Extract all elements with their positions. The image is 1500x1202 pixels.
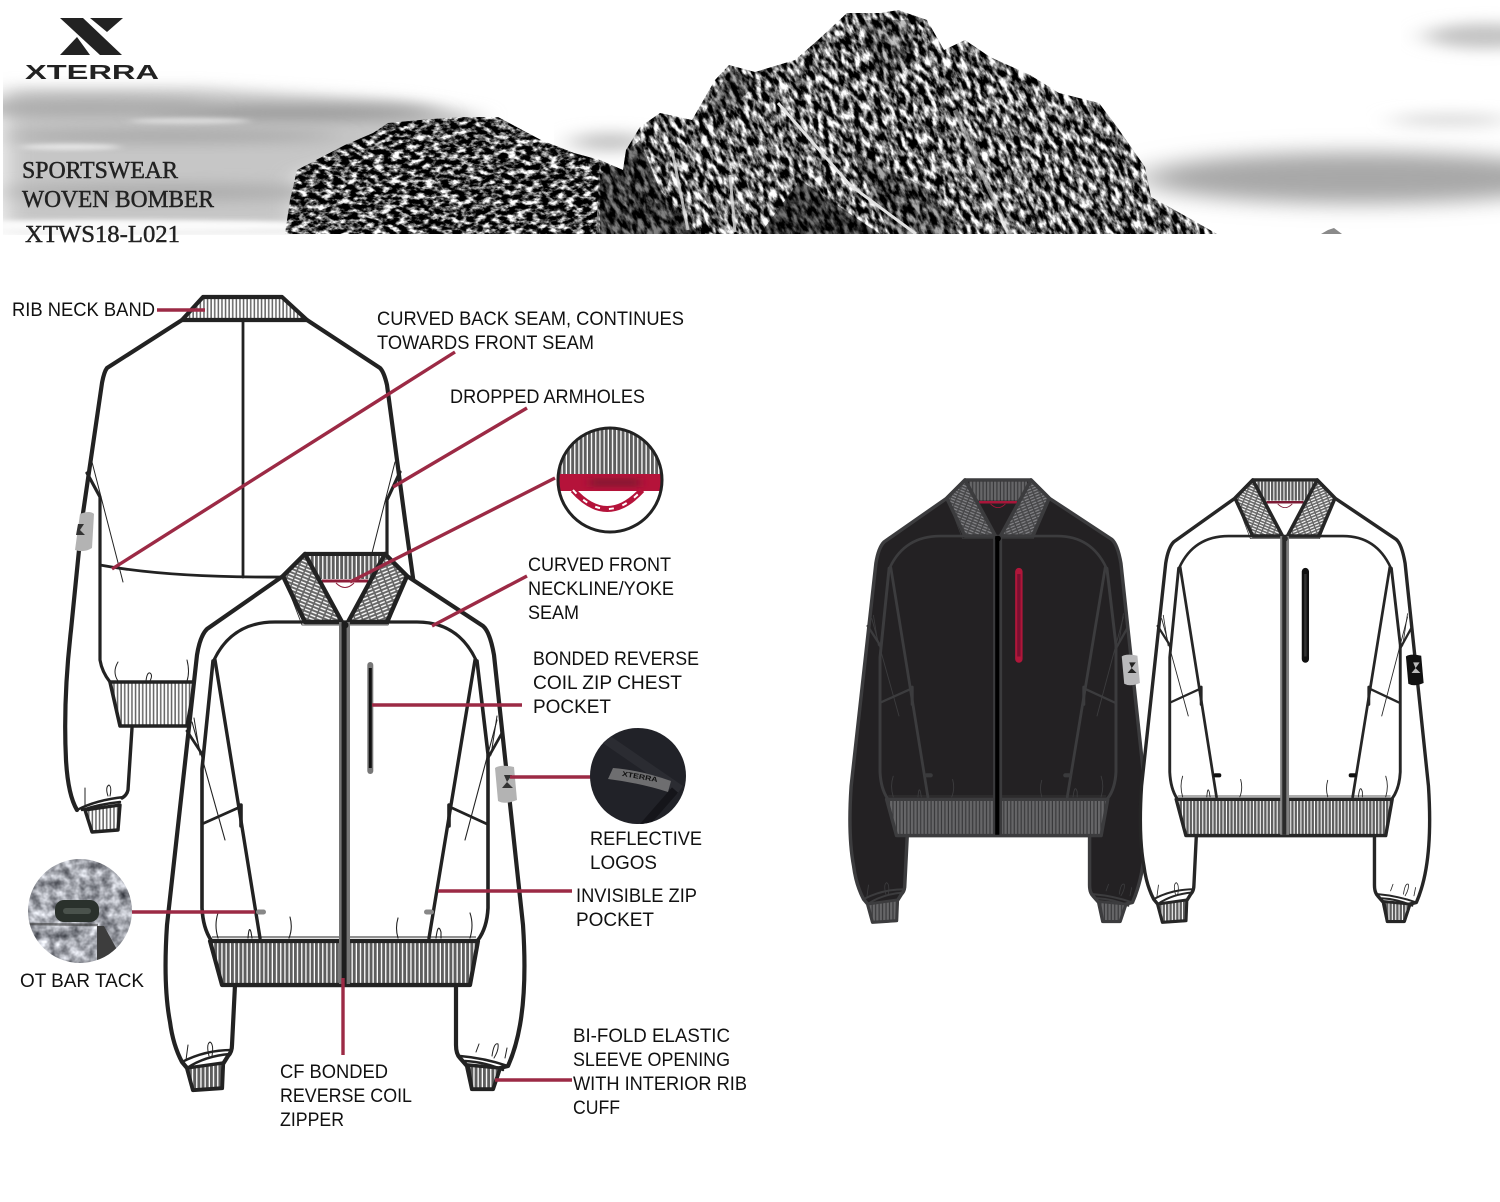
mountain left peak: [285, 117, 602, 234]
label: dropped armholes: DROPPED ARMHOLES: [450, 386, 645, 408]
label: reflective logos: [590, 828, 702, 874]
label: CF bonded zipper: CF BONDED: [280, 1061, 388, 1083]
coloured flat: black jacket: [850, 480, 1146, 922]
label: CF bonded zipper: ZIPPER: [280, 1109, 344, 1131]
label: curved front neckline: [528, 554, 674, 624]
style number: XTWS18-L021: [25, 222, 180, 248]
icon: Xterra logo mark: [60, 18, 123, 55]
small distant peak: [1321, 228, 1342, 234]
label: invisible zip pocket: POCKET: [576, 909, 654, 931]
label: chest pocket: POCKET: [533, 696, 611, 718]
title: sportswear: SPORTSWEAR: [22, 158, 178, 184]
label: curved back seam: TOWARDS FRONT SEAM: [377, 332, 594, 354]
detail circle: rib and hanger loop: [555, 425, 665, 532]
mountain main peak: [596, 10, 1217, 234]
detail circle: reflective logo: [590, 728, 686, 830]
label: chest pocket: COIL ZIP CHEST: [533, 672, 682, 694]
label: bi-fold elastic sleeve opening: CUFF: [573, 1097, 620, 1119]
coloured flat: white jacket: [1140, 480, 1430, 922]
detail circle: reflective logo: XTERRA: [621, 771, 658, 784]
front view jacket sketch: [166, 554, 524, 1090]
label: chest pocket: BONDED REVERSE: [533, 648, 699, 670]
sky clouds right: [570, 23, 1500, 294]
label: invisible zip pocket: [576, 885, 697, 931]
callout lines: [112, 310, 592, 1080]
label: bi-fold elastic sleeve opening: WITH INTERIOR RIB: [573, 1073, 747, 1095]
label: curved back seam: CURVED BACK SEAM, CONTINUES: [377, 308, 684, 330]
label: curved back seam: [377, 308, 684, 354]
back view jacket sketch: [65, 297, 414, 832]
label: bi-fold elastic sleeve opening: [573, 1025, 747, 1119]
label: CF bonded zipper: [280, 1061, 412, 1131]
label: reflective logos: REFLECTIVE: [590, 828, 702, 850]
logo wordmark: XTERRA: [25, 62, 159, 84]
title: woven bomber: WOVEN BOMBER: [22, 187, 214, 213]
label: bi-fold elastic sleeve opening: SLEEVE OPENING: [573, 1049, 730, 1071]
label: OT bar tack: OT BAR TACK: [20, 970, 144, 992]
label: bi-fold elastic sleeve opening: BI-FOLD ELASTIC: [573, 1025, 730, 1047]
label: reflective logos: LOGOS: [590, 852, 657, 874]
detail circle: OT bar tack: [28, 859, 132, 964]
sky clouds left: [0, 88, 478, 232]
label: invisible zip pocket: INVISIBLE ZIP: [576, 885, 697, 907]
label: curved front neckline: SEAM: [528, 602, 579, 624]
label: curved front neckline: CURVED FRONT: [528, 554, 671, 576]
panel: header banner: [0, 0, 1500, 669]
label: CF bonded zipper: REVERSE COIL: [280, 1085, 412, 1107]
label: rib neck band: RIB NECK BAND: [12, 299, 155, 321]
label: curved front neckline: NECKLINE/YOKE: [528, 578, 674, 600]
label: chest pocket: [533, 648, 699, 718]
